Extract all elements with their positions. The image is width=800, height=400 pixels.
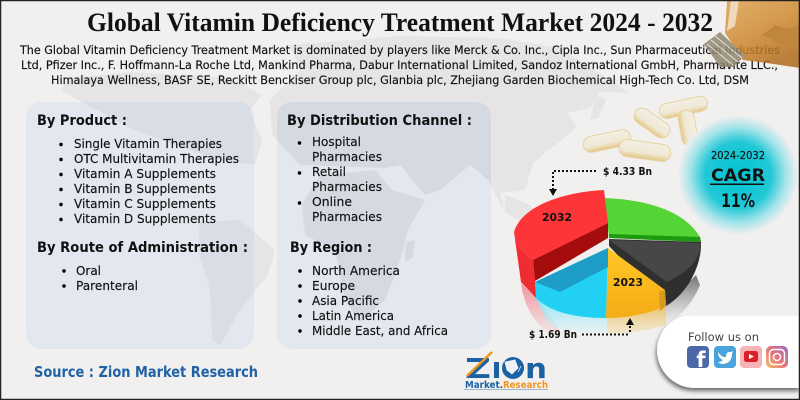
bottle (704, 0, 800, 68)
distribution list: Pharmacies (312, 180, 382, 194)
label: 2032: 2032 (542, 211, 572, 224)
heading: by distribution channel: By Distribution Channel : (287, 113, 472, 129)
source: Source : Zion Market Research (34, 363, 258, 381)
distribution list: Retail (312, 165, 346, 179)
intro text (19, 43, 780, 87)
icon: facebook: f (696, 348, 706, 372)
callout: 2032 value (549, 165, 652, 196)
zion logo (464, 352, 548, 391)
icon: facebook (687, 346, 709, 372)
panel: product and route (26, 102, 254, 349)
region list: Latin America (312, 309, 394, 323)
region list: Middle East, and Africa (312, 324, 448, 338)
route list (62, 264, 138, 293)
distribution list: Hospital (312, 135, 361, 149)
slice: green (605, 198, 701, 242)
callout: 2023 value (529, 318, 634, 341)
zion logo: Research (503, 380, 548, 391)
heading: by region: By Region : (290, 240, 372, 256)
3d pie chart (514, 190, 701, 334)
zion logo: Z (465, 352, 491, 385)
label: 2023: 2023 (613, 276, 643, 289)
intro text: Ltd, Pfizer Inc., F. Hoffmann-La Roche Ltd, Mankind Pharma, Dabur International Limited, Sandoz International GmbH, Pharmavite LLC., (21, 58, 778, 72)
cagr badge: CAGR (711, 166, 765, 186)
region list: Europe (312, 279, 355, 293)
region list: Asia Pacific (312, 294, 379, 308)
panel: distribution and region (277, 102, 491, 349)
slice: red (514, 190, 608, 298)
region list: North America (312, 264, 400, 278)
heading: by route: By Route of Administration : (37, 240, 248, 256)
zion logo: n (525, 352, 547, 385)
icon: twitter (714, 346, 736, 368)
product list (59, 137, 239, 226)
slice: orange (606, 248, 666, 318)
callout: 2023 value: $ 1.69 Bn (529, 328, 577, 341)
world map (60, 36, 630, 345)
product list: Vitamin C Supplements (74, 197, 216, 211)
reflection (521, 275, 700, 334)
product list: Single Vitamin Therapies (74, 137, 222, 151)
product list: Vitamin D Supplements (74, 212, 216, 226)
icon: instagram (766, 346, 788, 368)
distribution list: Pharmacies (312, 210, 382, 224)
distribution list (298, 135, 382, 224)
distribution list: Online (312, 195, 352, 209)
social panel (657, 315, 800, 388)
cagr badge (678, 115, 798, 235)
zion logo: Market. (465, 380, 503, 391)
follow us label: Follow us on (688, 330, 759, 344)
capsules (582, 95, 709, 163)
slice: dark (609, 239, 701, 306)
product list: Vitamin B Supplements (74, 182, 216, 196)
title: Global Vitamin Deficiency Treatment Market 2024 - 2032 (87, 8, 713, 37)
intro text: Himalaya Wellness, BASF SE, Reckitt Benckiser Group plc, Glanbia plc, Zhejiang Garden Biochemical High-Tech Co. Ltd, DSM (51, 73, 749, 87)
icon: youtube (740, 346, 762, 368)
intro text: The Global Vitamin Deficiency Treatment Market is dominated by players like Merck & Co. Inc., Cipla Inc., Sun Pharmaceutical Industries (19, 43, 780, 57)
region list (298, 264, 448, 338)
route list: Parenteral (76, 279, 138, 293)
distribution list: Pharmacies (312, 150, 382, 164)
heading: by product: By Product : (37, 113, 127, 129)
route list: Oral (76, 264, 101, 278)
callout: 2032 value: $ 4.33 Bn (603, 165, 652, 178)
cagr badge: 2024-2032 (711, 150, 765, 162)
slice: cyan (535, 248, 608, 318)
cagr badge: 11% (721, 190, 755, 212)
product list: Vitamin A Supplements (74, 167, 216, 181)
product list: OTC Multivitamin Therapies (74, 152, 239, 166)
